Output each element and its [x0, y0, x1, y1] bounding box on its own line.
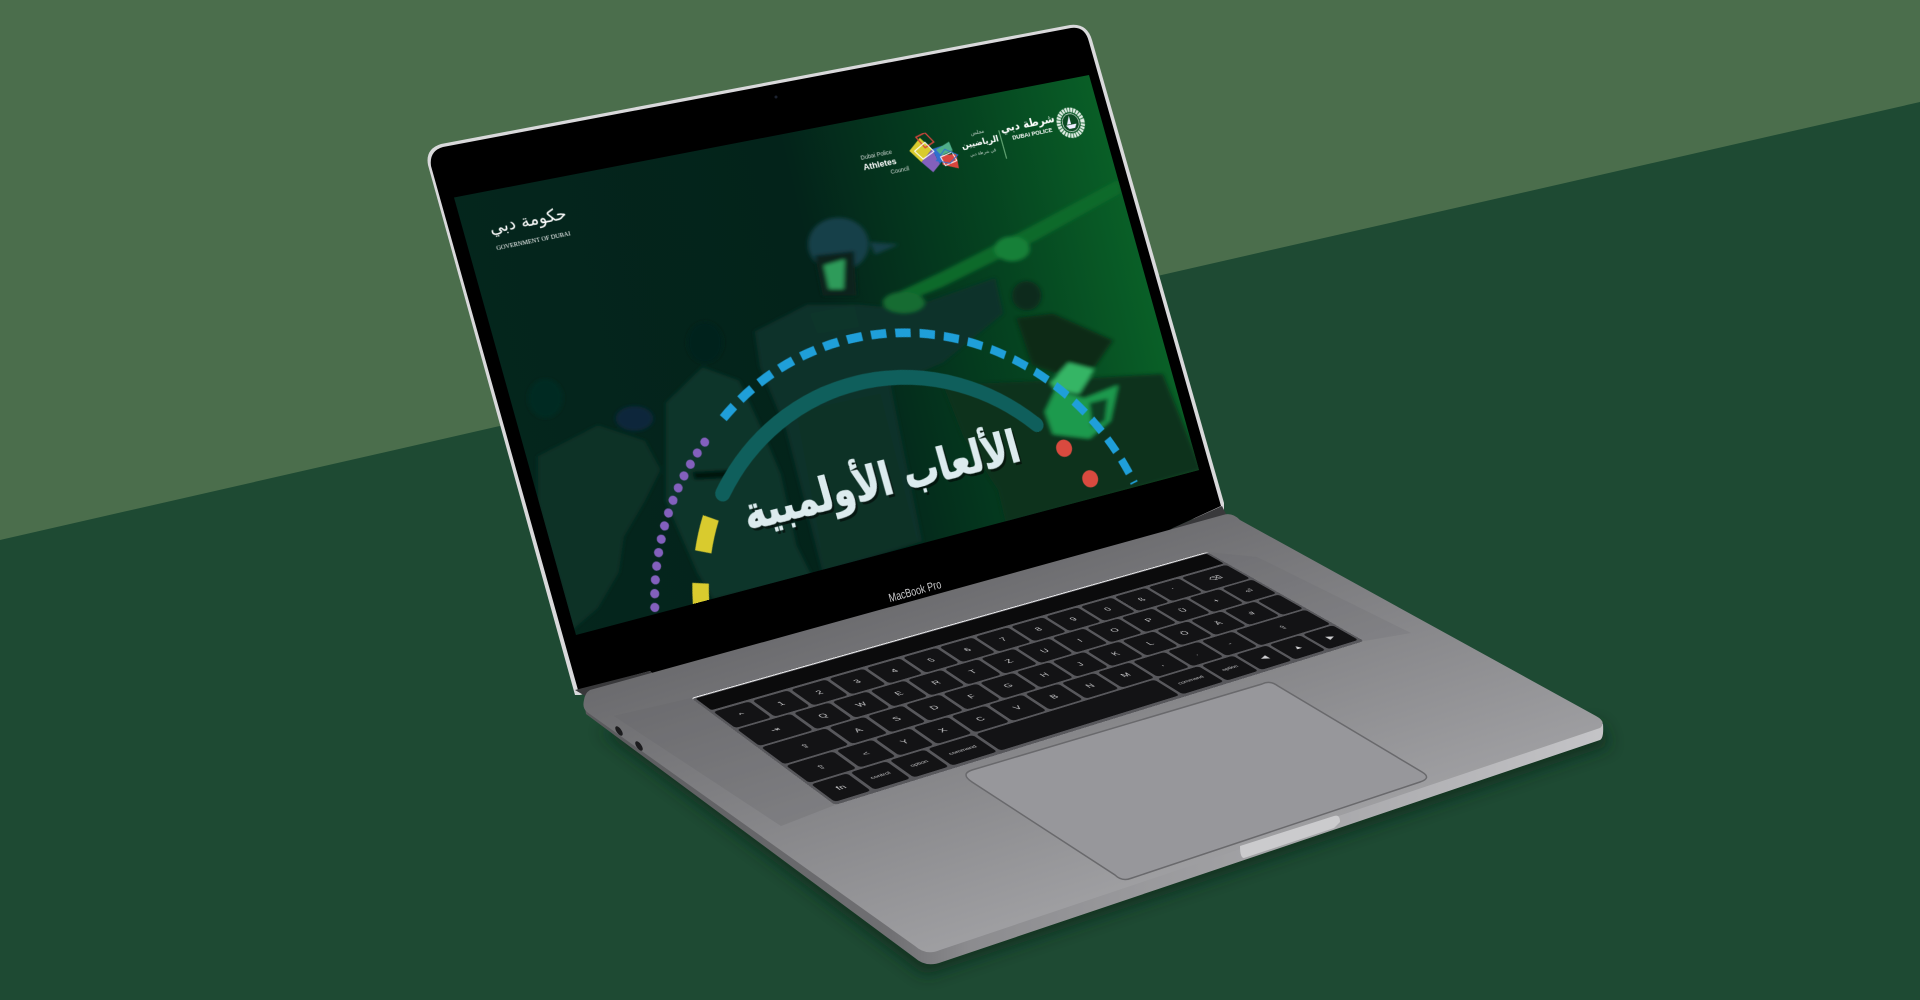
key row: numbers: 9 [1067, 616, 1079, 622]
key row: QWERTZ: W [853, 701, 869, 708]
camera [774, 96, 778, 98]
Dubai Police name: شرطة دبي [999, 112, 1056, 136]
key row: ASDF: K [1109, 650, 1122, 657]
key row: modifiers: ▶ [1323, 634, 1337, 640]
logo: Athletes Council english: Athletes [862, 156, 898, 172]
speaker grille left [614, 698, 835, 826]
key row: numbers: 1 [775, 700, 787, 707]
logo: Athletes Council arabic: في شرطة دبي [969, 147, 997, 158]
key row: numbers: 4 [888, 668, 900, 674]
emblem [1056, 107, 1086, 138]
key row: YXCV: < [859, 750, 872, 757]
key row: numbers [714, 565, 1249, 728]
key row: modifiers: command [1176, 675, 1205, 685]
key row: ASDF: D [927, 704, 941, 711]
key row: QWERTZ: + [1210, 598, 1222, 603]
key row: YXCV: C [973, 715, 987, 722]
base top surface [583, 514, 1603, 952]
athlete photo silhouettes [528, 180, 1202, 630]
key row: YXCV: V [1011, 704, 1024, 711]
logo: Athletes Council english: Dubai Police [860, 148, 893, 161]
logo: Athletes Council english: Council [890, 165, 910, 175]
key row: YXCV: , [1156, 662, 1166, 667]
key row: QWERTZ: U [1038, 647, 1051, 654]
key row: YXCV: . [1190, 651, 1200, 656]
key row: YXCV: N [1083, 682, 1097, 689]
key row: modifiers [812, 626, 1357, 802]
key row: numbers: 3 [851, 678, 863, 684]
key row: QWERTZ [738, 580, 1275, 746]
logo: Government of Dubai [487, 203, 571, 252]
key row: modifiers: option [1220, 664, 1240, 672]
hinge band [575, 506, 1228, 700]
touch bar [696, 554, 1224, 710]
MacBook Pro label: MacBook Pro [887, 577, 943, 605]
key row: ASDF: G [1001, 682, 1015, 689]
key row: numbers: 2 [813, 689, 825, 695]
key row: numbers: 7 [997, 636, 1009, 642]
key row: YXCV: Y [898, 738, 911, 745]
key row: YXCV: - [1224, 641, 1235, 646]
speaker grille right [1207, 552, 1411, 641]
key row: QWERTZ: Q [816, 712, 830, 719]
key row: ASDF: S [890, 715, 903, 722]
rider and horse [943, 281, 1202, 523]
key row: ASDF [762, 595, 1302, 764]
key row: YXCV: B [1047, 693, 1061, 700]
key row: modifiers: control [869, 771, 892, 780]
logo: Government of Dubai: GOVERNMENT OF DUBAI [495, 230, 571, 252]
key row: ASDF: F [965, 693, 978, 700]
key row: numbers: ⌫ [1206, 574, 1225, 582]
key row: YXCV: M [1118, 671, 1133, 678]
key row: ASDF: # [1246, 610, 1258, 616]
karate athlete centre [666, 322, 812, 599]
key row: QWERTZ: E [892, 690, 905, 697]
screen background [454, 75, 1199, 635]
logo: Athletes Council arabic [960, 128, 1000, 158]
key row: YXCV: ⇧ [1276, 624, 1290, 631]
key row: QWERTZ: Ü [1176, 607, 1189, 613]
key row: ASDF: L [1144, 640, 1156, 646]
USB-C ports [614, 725, 644, 752]
key row: QWERTZ: Z [1003, 658, 1015, 664]
key row: numbers: 5 [925, 657, 937, 663]
screen content [487, 107, 1138, 612]
purple dotted arc [613, 442, 746, 614]
blue dashed arc [710, 287, 1134, 580]
laptop shadow [600, 725, 1610, 975]
key row: numbers: ^ [736, 711, 748, 718]
key row: QWERTZ: P [1142, 617, 1155, 623]
key row: numbers: 8 [1032, 626, 1044, 632]
key row: numbers: 6 [961, 647, 973, 653]
logo: Athletes Council arabic: مجلس [970, 128, 985, 136]
logo: coloured squares [909, 132, 960, 172]
lid [428, 25, 1224, 695]
teal arc [702, 346, 1037, 503]
key row: ASDF: J [1074, 661, 1086, 667]
key row: modifiers: ◀ [1257, 654, 1271, 661]
key row: YXCV [788, 610, 1330, 782]
divider [998, 130, 1007, 159]
Dubai Police english: DUBAI POLICE [1011, 127, 1053, 142]
key row: QWERTZ: I [1075, 638, 1085, 643]
key row: QWERTZ: T [966, 669, 979, 675]
key row: numbers: 0 [1102, 606, 1113, 612]
logo: Dubai Police [999, 107, 1086, 142]
key row: YXCV: X [936, 727, 949, 734]
red dots [1054, 434, 1100, 493]
key row: modifiers: option [908, 759, 930, 768]
key row: QWERTZ: ⏎ [1242, 588, 1256, 594]
key row: ASDF: Ä [1212, 620, 1225, 626]
key row: ASDF: A [851, 727, 865, 734]
key row: numbers: ´ [1170, 587, 1180, 592]
arcs and dots [650, 328, 1138, 612]
trackpad [966, 682, 1427, 879]
shooter with shotgun [755, 180, 1121, 572]
key row: QWERTZ: O [1108, 627, 1121, 633]
base side edge [584, 700, 1603, 964]
logo: Athletes Council english [860, 148, 910, 175]
keyboard [691, 552, 1364, 805]
key row: modifiers: command [947, 744, 978, 756]
background: diagonal band [0, 0, 1920, 540]
front opening notch [1240, 816, 1340, 858]
logo: Athletes Council arabic: الرياضيين [960, 134, 1000, 151]
key row: modifiers: fn [833, 783, 849, 791]
key row: numbers: ß [1135, 596, 1148, 602]
key row: ASDF: ⇪ [797, 742, 813, 750]
yellow arc segments [678, 518, 735, 612]
key row: QWERTZ: ⇥ [768, 726, 783, 733]
key row: YXCV: ⇧ [813, 763, 829, 771]
key row: modifiers: ▲ [1289, 644, 1305, 651]
title: الألعاب الأولمبية [737, 421, 1025, 541]
karate athlete left [528, 379, 661, 630]
logo: Government of Dubai: حكومة دبي [487, 203, 569, 238]
key row: ASDF: H [1038, 671, 1051, 678]
key row: QWERTZ: R [929, 679, 943, 686]
key row: ASDF: Ö [1177, 630, 1191, 636]
